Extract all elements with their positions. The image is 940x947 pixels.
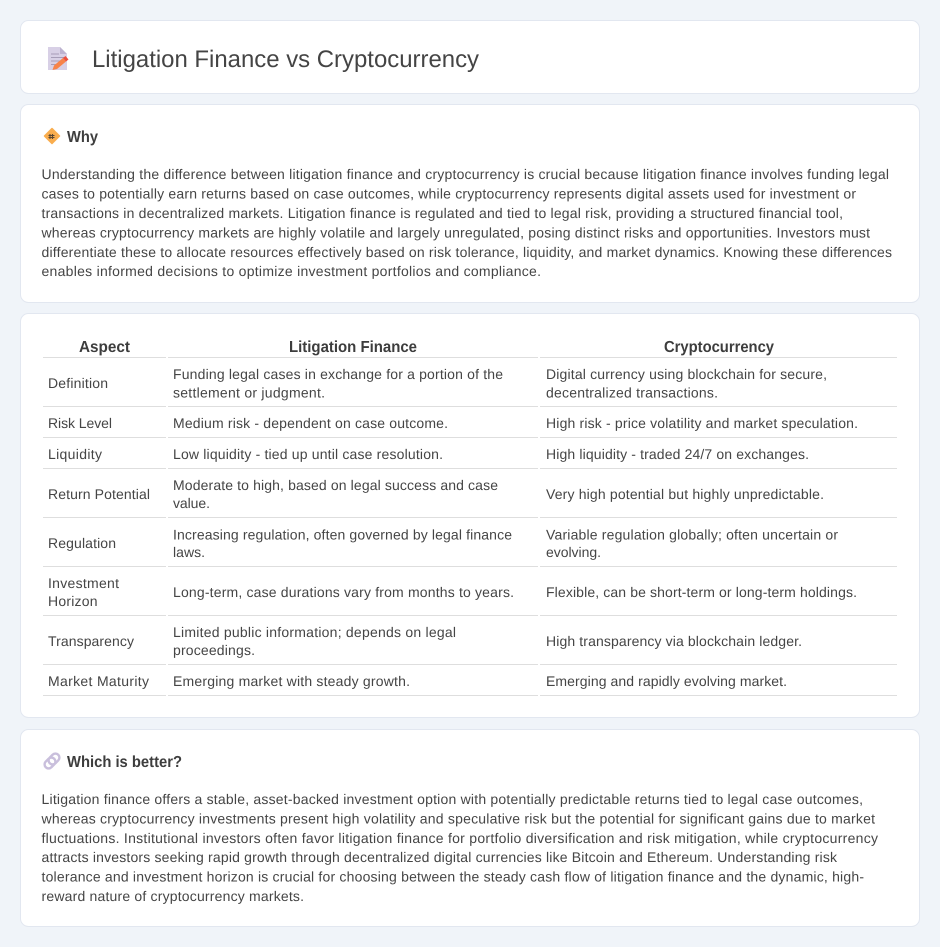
text block: which is better paragraph: tolerance and investment horizon is crucial for choosing between the steady cash flow of litigation finance and the dynamic, high- — [42, 868, 864, 884]
panel: comparison table — [20, 314, 920, 718]
text block: which is better paragraph: Litigation finance offers a stable, asset-backed investment option with potentially predictable returns tied to legal case outcomes, — [42, 791, 863, 807]
row: regulation: Variable regulation globally; often uncertain or — [546, 526, 838, 542]
row: definition: settlement or judgment. — [173, 384, 325, 400]
text block: why paragraph: cases to potentially earn returns based on case outcomes, while cryptocurrency represents digital assets used for investment or — [42, 186, 856, 202]
text block: why paragraph: Understanding the difference between litigation finance and cryptocurrency is crucial because litigation finance involves funding legal — [42, 166, 889, 182]
table header: Cryptocurrency — [664, 339, 774, 356]
row: investment horizon: Horizon — [48, 593, 98, 609]
text block: why paragraph: whereas cryptocurrency markets are highly volatile and largely unregulated, posing distinct risks and opportunities. Investors must — [40, 224, 870, 240]
text block: which is better paragraph: whereas cryptocurrency investments present high volatility and speculative risk but the potential for significant gains due to market — [40, 810, 875, 826]
table header: Litigation Finance — [289, 339, 417, 356]
row: regulation: Increasing regulation, often governed by legal finance — [173, 526, 512, 542]
title: Litigation Finance vs Cryptocurrency — [92, 46, 479, 73]
row: definition: Digital currency using blockchain for secure, — [546, 366, 827, 382]
heading: which is better: Which is better? — [67, 754, 182, 771]
row: definition: Funding legal cases in exchange for a portion of the — [173, 366, 503, 382]
row: liquidity: Liquidity — [48, 446, 102, 462]
row: risk level: Risk Level — [48, 415, 112, 431]
row: return potential — [48, 477, 824, 511]
row: risk level — [48, 415, 858, 431]
panel: which is better — [20, 730, 920, 926]
row: liquidity — [48, 446, 809, 462]
row: liquidity: Low liquidity - tied up until case resolution. — [173, 446, 443, 462]
row: return potential: Moderate to high, based on legal success and case — [173, 477, 498, 493]
row: regulation — [48, 526, 838, 560]
heading: why: Why — [67, 129, 98, 146]
row: transparency: proceedings. — [173, 642, 255, 658]
icon: document with pencil — [48, 47, 68, 70]
row: investment horizon: Investment — [48, 575, 119, 591]
text block: why paragraph — [40, 166, 892, 279]
row: market maturity: Emerging market with steady growth. — [173, 673, 410, 689]
row: regulation: Regulation — [48, 535, 116, 551]
text block: why paragraph: enables informed decisions to optimize investment portfolios and compliance. — [42, 263, 541, 279]
text block: which is better paragraph: reward nature of cryptocurrency markets. — [42, 888, 304, 904]
row: definition — [48, 366, 827, 400]
text block: which is better paragraph: fluctuations. Institutional investors often favor litigation finance for portfolio diversification and risk mitigation, while cryptocurrency — [42, 830, 878, 846]
icon: orange diamond — [44, 128, 60, 144]
row: investment horizon: Flexible, can be short-term or long-term holdings. — [546, 584, 857, 600]
table header — [79, 339, 774, 356]
row: risk level: High risk - price volatility and market speculation. — [546, 415, 858, 431]
text block: why paragraph: transactions in decentralized markets. Litigation finance is regulated and tied to legal risk, providing a structured financial tool, — [42, 205, 843, 221]
row: market maturity: Emerging and rapidly evolving market. — [546, 673, 787, 689]
row: return potential: Return Potential — [48, 486, 150, 502]
row: regulation: evolving. — [546, 544, 601, 560]
row: market maturity: Market Maturity — [48, 673, 149, 689]
row: regulation: laws. — [173, 544, 205, 560]
row: risk level: Medium risk - dependent on case outcome. — [173, 415, 448, 431]
row: transparency — [48, 624, 802, 658]
row: market maturity — [48, 673, 787, 689]
row: transparency: High transparency via blockchain ledger. — [546, 633, 802, 649]
row: definition: decentralized transactions. — [546, 384, 718, 400]
text block: why paragraph: differentiate these to allocate resources effectively based on risk tolerance, liquidity, and market dynamics. Knowing these differences — [42, 244, 892, 260]
row: investment horizon: Long-term, case durations vary from months to years. — [173, 584, 514, 600]
panel: why — [20, 104, 920, 302]
row: return potential: Very high potential but highly unpredictable. — [546, 486, 824, 502]
row: return potential: value. — [173, 495, 210, 511]
text block: which is better paragraph: attracts investors seeking rapid growth through decentralized digital currencies like Bitcoin and Ethereum. Understanding risk — [42, 849, 838, 865]
row: investment horizon — [48, 575, 857, 609]
row: transparency: Limited public information; depends on legal — [173, 624, 456, 640]
table header: Aspect — [79, 339, 131, 356]
text block: which is better paragraph — [40, 791, 878, 904]
row: transparency: Transparency — [48, 633, 134, 649]
row: liquidity: High liquidity - traded 24/7 on exchanges. — [546, 446, 809, 462]
row: definition: Definition — [48, 375, 108, 391]
panel: title header — [20, 20, 920, 94]
icon: link — [43, 752, 61, 770]
